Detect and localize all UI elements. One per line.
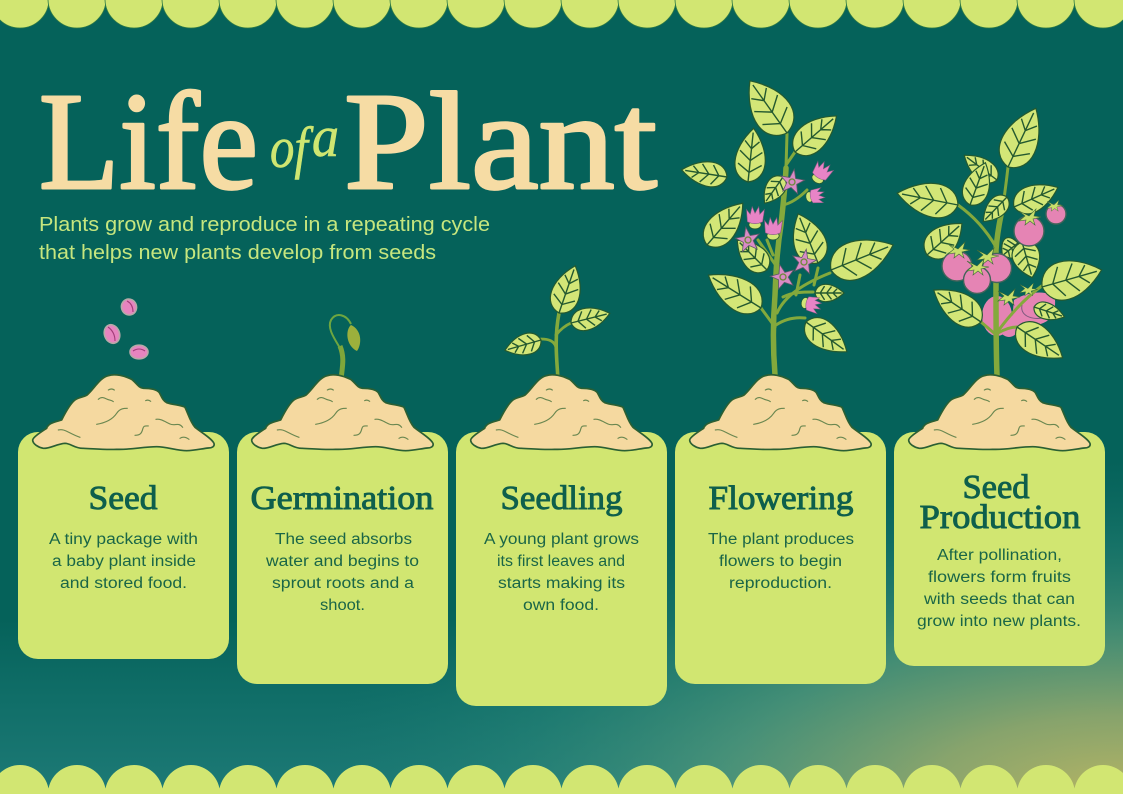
description: seed: a baby plant inside: [52, 553, 196, 570]
title: a: [312, 104, 339, 169]
description: seedling: starts making its: [498, 575, 625, 592]
heading: seed production: Seed: [962, 469, 1030, 506]
description: seed production: After pollination,: [937, 547, 1062, 564]
heading: flowering: Flowering: [708, 480, 854, 517]
icon: seedling plant: [502, 261, 612, 380]
bottom scalloped border: [0, 765, 1123, 794]
description: germination: [265, 531, 419, 614]
title: Life: [39, 65, 258, 219]
description: seedling: A young plant grows: [484, 531, 639, 548]
soil mound: [909, 375, 1090, 451]
description: seedling: its first leaves and: [497, 553, 625, 570]
panel: seedling: [456, 261, 667, 706]
description: seed production: [917, 547, 1081, 630]
heading: seedling: Seedling: [500, 480, 622, 517]
heading: seed production: [920, 469, 1080, 536]
card: seedling: [456, 432, 667, 706]
description: germination: The seed absorbs: [275, 531, 412, 548]
card: seed production: [894, 432, 1105, 666]
soil mound: [33, 375, 214, 451]
heading: germination: Germination: [250, 480, 434, 517]
soil mound: [252, 375, 433, 451]
soil mound: [471, 375, 652, 451]
panel: flowering: [675, 70, 900, 684]
description: germination: water and begins to: [265, 553, 419, 570]
icon: fruiting plant: [894, 101, 1107, 375]
description: flowering: The plant produces: [708, 531, 854, 548]
description: germination: sprout roots and a: [272, 575, 414, 592]
card: flowering: [675, 432, 886, 684]
soil mound: [690, 375, 871, 451]
icon: falling seeds: [102, 297, 148, 359]
description: flowering: [708, 531, 854, 592]
description: seed production: with seeds that can: [923, 591, 1075, 608]
heading: seed production: Production: [920, 499, 1080, 536]
description: flowering: flowers to begin: [719, 553, 842, 570]
subtitle: [39, 213, 490, 264]
title: of: [270, 115, 314, 180]
title: Plant: [344, 65, 657, 219]
panel: seed production: [894, 101, 1107, 666]
description: germination: shoot.: [320, 597, 365, 614]
description: seed: [49, 531, 198, 592]
description: seed: A tiny package with: [49, 531, 198, 548]
description: seedling: own food.: [523, 597, 599, 614]
top scalloped border: [0, 0, 1123, 28]
subtitle: Plants grow and reproduce in a repeating cycle: [39, 213, 490, 236]
icon: flowering plant: [680, 70, 900, 375]
title: [39, 65, 657, 219]
heading: seed: Seed: [88, 480, 158, 517]
description: seed production: grow into new plants.: [917, 613, 1081, 630]
card: germination: [237, 432, 448, 684]
subtitle: that helps new plants develop from seeds: [39, 241, 436, 264]
description: flowering: reproduction.: [729, 575, 832, 592]
description: seed: and stored food.: [60, 575, 187, 592]
icon: sprout: [330, 315, 360, 380]
panel: seed: [18, 297, 229, 659]
description: seed production: flowers form fruits: [928, 569, 1071, 586]
description: seedling: [484, 531, 639, 614]
card: seed: [18, 432, 229, 659]
panel: germination: [237, 315, 448, 684]
